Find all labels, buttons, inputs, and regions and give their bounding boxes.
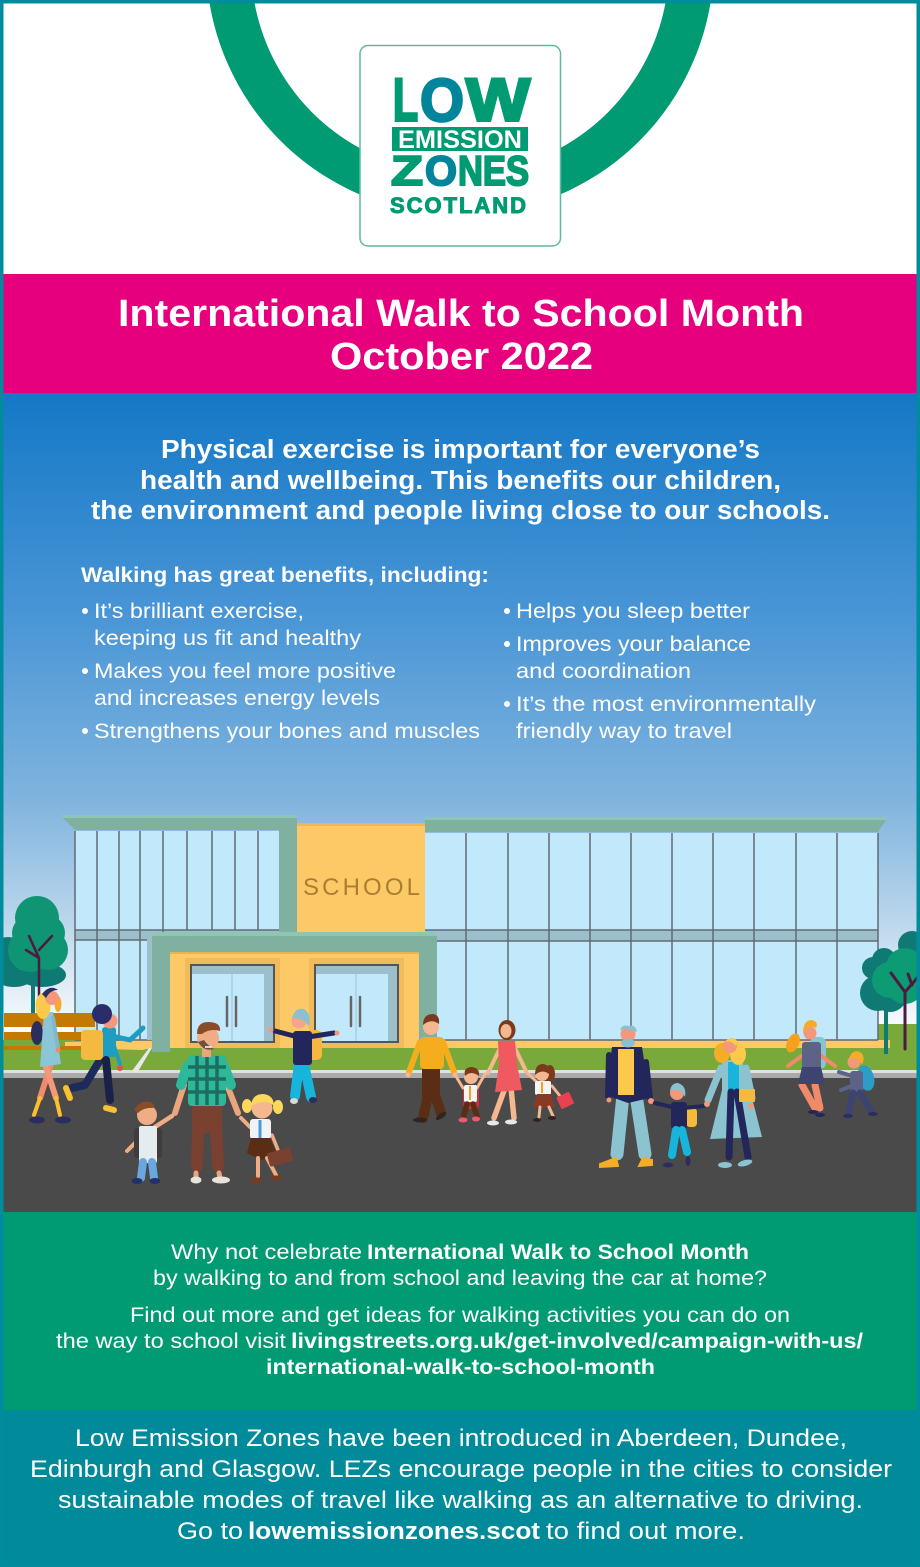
- benefits list: right column: and coordination: [516, 660, 691, 683]
- logo: EMISSION: [398, 126, 522, 154]
- person: boy with red backpack: [457, 1067, 485, 1122]
- person: woman with blonde hair walking: [29, 988, 71, 1124]
- benefits list: left column: It’s brilliant exercise,: [94, 600, 304, 623]
- title banner: [0, 274, 920, 393]
- logo: SCOTLAND: [390, 193, 526, 218]
- door left: [190, 964, 275, 1043]
- benefits list: right column: [504, 600, 817, 743]
- walking call to action panel: Find out more and get ideas for walking activities you can do on: [130, 1304, 790, 1327]
- benefits list: right column: It’s the most environmentally: [516, 693, 817, 716]
- walking call to action panel: livingstreets.org.uk/get-involved/campaign-with-us/: [291, 1330, 863, 1353]
- logo: O: [420, 67, 464, 134]
- intro statement: the environment and people living close to our schools.: [91, 497, 830, 525]
- low emission zones panel: Low Emission Zones have been introduced in Aberdeen, Dundee,: [75, 1425, 847, 1452]
- tree right: [860, 931, 920, 1054]
- benefits list: left column: [82, 600, 480, 743]
- logo: L: [393, 66, 418, 134]
- logo: NES: [458, 147, 529, 194]
- logo: O: [425, 147, 457, 194]
- person: woman in red dress: [487, 1020, 526, 1126]
- low emission zones panel: to find out more.: [546, 1518, 745, 1545]
- left wing windows: [75, 831, 279, 1040]
- title banner: International Walk to School Month: [118, 293, 804, 335]
- logo: W: [466, 66, 530, 134]
- right wing roof: [425, 817, 888, 832]
- low emission zones panel: lowemissionzones.scot: [248, 1518, 540, 1545]
- low emission zones panel: Edinburgh and Glasgow. LEZs encourage people in the cities to consider: [30, 1456, 892, 1483]
- scene: ground and lawn: [0, 1024, 920, 1212]
- walking call to action panel: Why not celebrate: [171, 1241, 362, 1264]
- entrance: [147, 932, 437, 1052]
- person: child holding grandparents' hands: [655, 1083, 704, 1168]
- benefits list: right column: Helps you sleep better: [516, 600, 750, 623]
- intro statement: [91, 436, 830, 525]
- person: woman in long light coat: [704, 1038, 762, 1168]
- person: grandfather in navy jacket: [600, 1026, 654, 1167]
- person: girl with orange ponytail: [783, 1020, 835, 1117]
- walking call to action panel: International Walk to School Month: [367, 1241, 749, 1264]
- green ring arc: [209, 0, 711, 215]
- intro statement: health and wellbeing. This benefits our children,: [140, 467, 781, 495]
- person: boy with blue backpack: [839, 1051, 878, 1118]
- low emission zones panel: [0, 1410, 920, 1567]
- benefits list: left column: Strengthens your bones and muscles: [94, 720, 480, 743]
- low emission zones panel: Go to: [177, 1518, 243, 1545]
- person: man in yellow jumper: [406, 1014, 458, 1122]
- tree left: [0, 896, 68, 1013]
- logo: [360, 46, 560, 246]
- walking call to action panel: by walking to and from school and leaving the car at home?: [153, 1267, 767, 1290]
- benefits list: left column: and increases energy levels: [94, 687, 380, 710]
- school sign block: SCHOOL: [303, 874, 420, 901]
- walking call to action panel: the way to school visit: [56, 1330, 286, 1353]
- school building: [60, 815, 888, 1052]
- person: girl with pink bag: [526, 1064, 574, 1122]
- low emission zones panel: sustainable modes of travel like walking as an alternative to driving.: [58, 1487, 863, 1514]
- right wing windows: [425, 833, 878, 1040]
- sky background: [0, 393, 920, 1073]
- door right: [314, 964, 399, 1043]
- logo: Z: [391, 147, 423, 194]
- benefits list: left column: keeping us fit and healthy: [94, 627, 362, 650]
- title banner: October 2022: [330, 336, 593, 378]
- benefits list: right column: friendly way to travel: [516, 720, 732, 743]
- person: running boy with backpack: [66, 1004, 143, 1110]
- left wing roof: [60, 815, 297, 932]
- person: boy holding father's hand: [127, 1102, 172, 1184]
- walking call to action panel: international-walk-to-school-month: [266, 1356, 655, 1379]
- person: child with outstretched arms: [268, 1009, 340, 1104]
- school sign block: [297, 823, 425, 933]
- benefits list: left column: Makes you feel more positive: [94, 660, 396, 683]
- benefits list: right column: Improves your balance: [516, 633, 751, 656]
- bench: [4, 1013, 95, 1050]
- person: girl with blonde pigtails and briefcase: [241, 1094, 293, 1182]
- header panel: [0, 0, 920, 274]
- intro statement: Physical exercise is important for everyone’s: [161, 436, 760, 464]
- benefits heading: Walking has great benefits, including:: [81, 564, 489, 587]
- walking call to action panel: [0, 1212, 920, 1410]
- person: father in checked shirt: [175, 1022, 238, 1184]
